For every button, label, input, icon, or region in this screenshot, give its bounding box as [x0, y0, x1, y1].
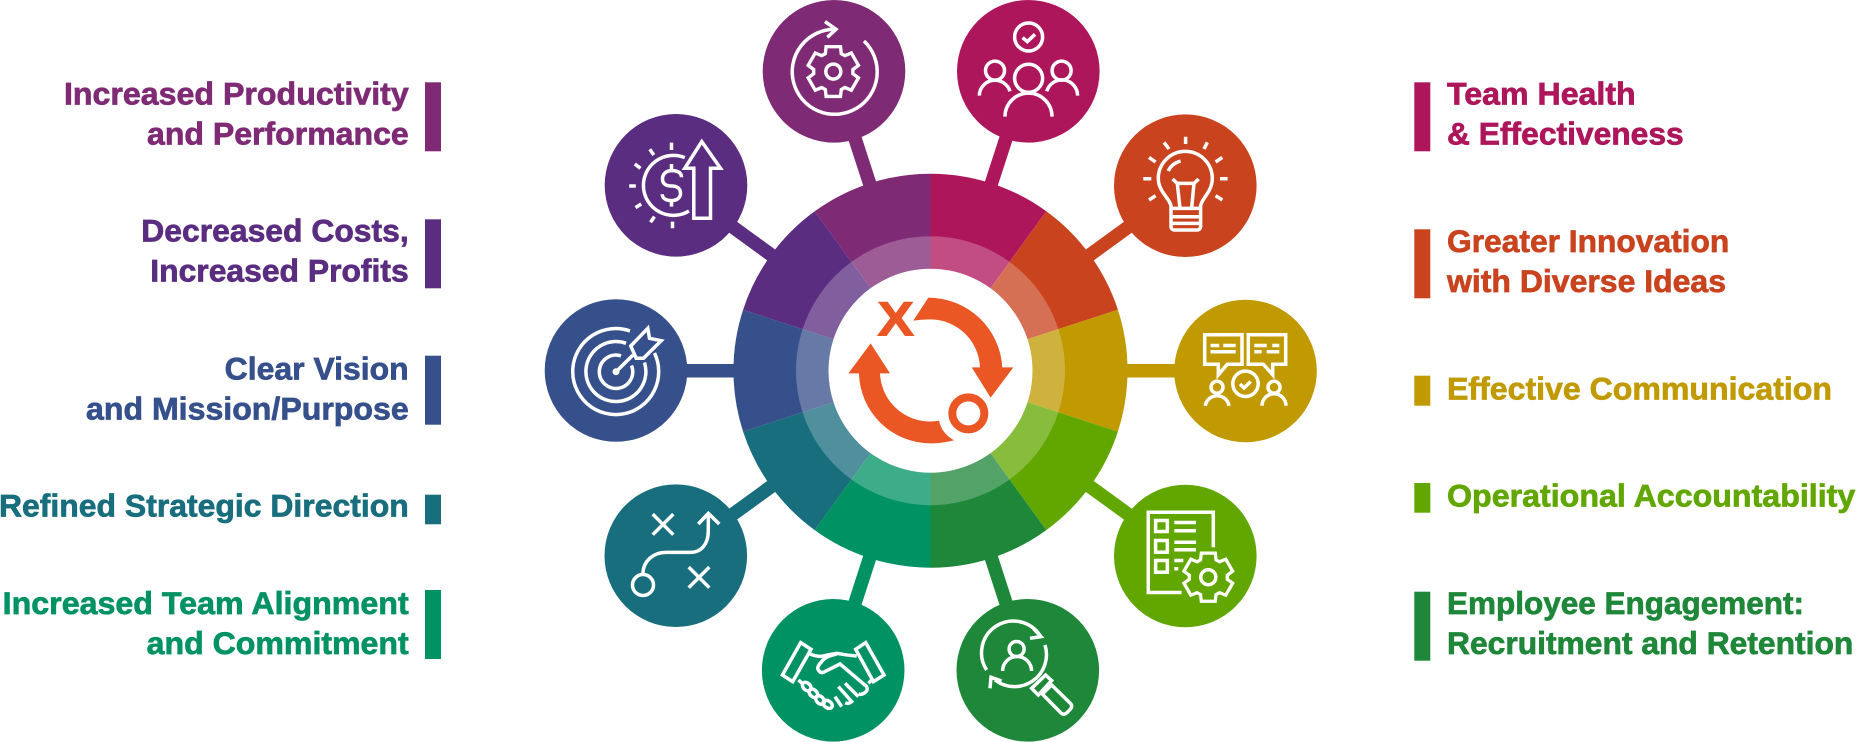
icon: light bulb: [1114, 114, 1257, 257]
colour wheel: [733, 174, 1128, 568]
icon: speech bubbles and people: [1174, 300, 1317, 442]
label: Employee Engagement: Recruitment and Retention: [1414, 585, 1853, 661]
label: Operational Accountability: Operational Accountability: [1447, 478, 1856, 514]
label: Employee Engagement: Recruitment and Retention: Employee Engagement:: [1447, 585, 1804, 621]
label: Increased Team Alignment and Commitment: and Commitment: [147, 625, 409, 661]
icon: team with check: [957, 0, 1100, 143]
icon: target with arrow: [545, 299, 687, 442]
label: Increased Team Alignment and Commitment: Increased Team Alignment: [3, 585, 409, 621]
icon: dollar with rising arrow: [605, 114, 747, 257]
label: Decreased Costs, Increased Profits: Increased Profits: [150, 253, 409, 289]
left labels: [0, 75, 441, 661]
right labels: [1414, 75, 1856, 661]
label: Clear Vision and Mission/Purpose: and Mission/Purpose: [86, 390, 409, 426]
label: Decreased Costs, Increased Profits: [141, 213, 441, 289]
label: Greater Innovation with Diverse Ideas: [1414, 223, 1729, 299]
label: Increased Team Alignment and Commitment: [3, 585, 441, 661]
label: Team Health & Effectiveness: & Effectiveness: [1447, 115, 1684, 151]
icon: gear with cycle arrow: [763, 0, 905, 143]
label: Increased Productivity and Performance: and Performance: [147, 115, 409, 151]
label: Team Health & Effectiveness: [1414, 75, 1684, 151]
label: Clear Vision and Mission/Purpose: [86, 350, 441, 426]
label: Greater Innovation with Diverse Ideas: with Diverse Ideas: [1446, 263, 1726, 299]
label: Refined Strategic Direction: Refined Strategic Direction: [0, 488, 409, 524]
icon: checklist with gear: [1114, 485, 1257, 627]
label: Clear Vision and Mission/Purpose: Clear Vision: [225, 350, 409, 386]
centre logo: X and O cycle: X: [877, 293, 915, 347]
label: Greater Innovation with Diverse Ideas: Greater Innovation: [1447, 223, 1729, 259]
centre logo: X and O cycle: [848, 293, 1013, 443]
connector spokes: [680, 133, 1180, 608]
label: Increased Productivity and Performance: [64, 75, 441, 151]
icon: magnifier with person: [957, 599, 1099, 742]
label: Employee Engagement: Recruitment and Retention: Recruitment and Retention: [1447, 625, 1853, 661]
label: Increased Productivity and Performance: Increased Productivity: [64, 75, 409, 111]
label: Effective Communication: Effective Communication: [1447, 370, 1832, 406]
icon: handshake: [762, 599, 904, 742]
label: Decreased Costs, Increased Profits: Decreased Costs,: [141, 213, 409, 249]
icon: strategy play path: [604, 484, 747, 627]
label: Team Health & Effectiveness: Team Health: [1447, 75, 1636, 111]
